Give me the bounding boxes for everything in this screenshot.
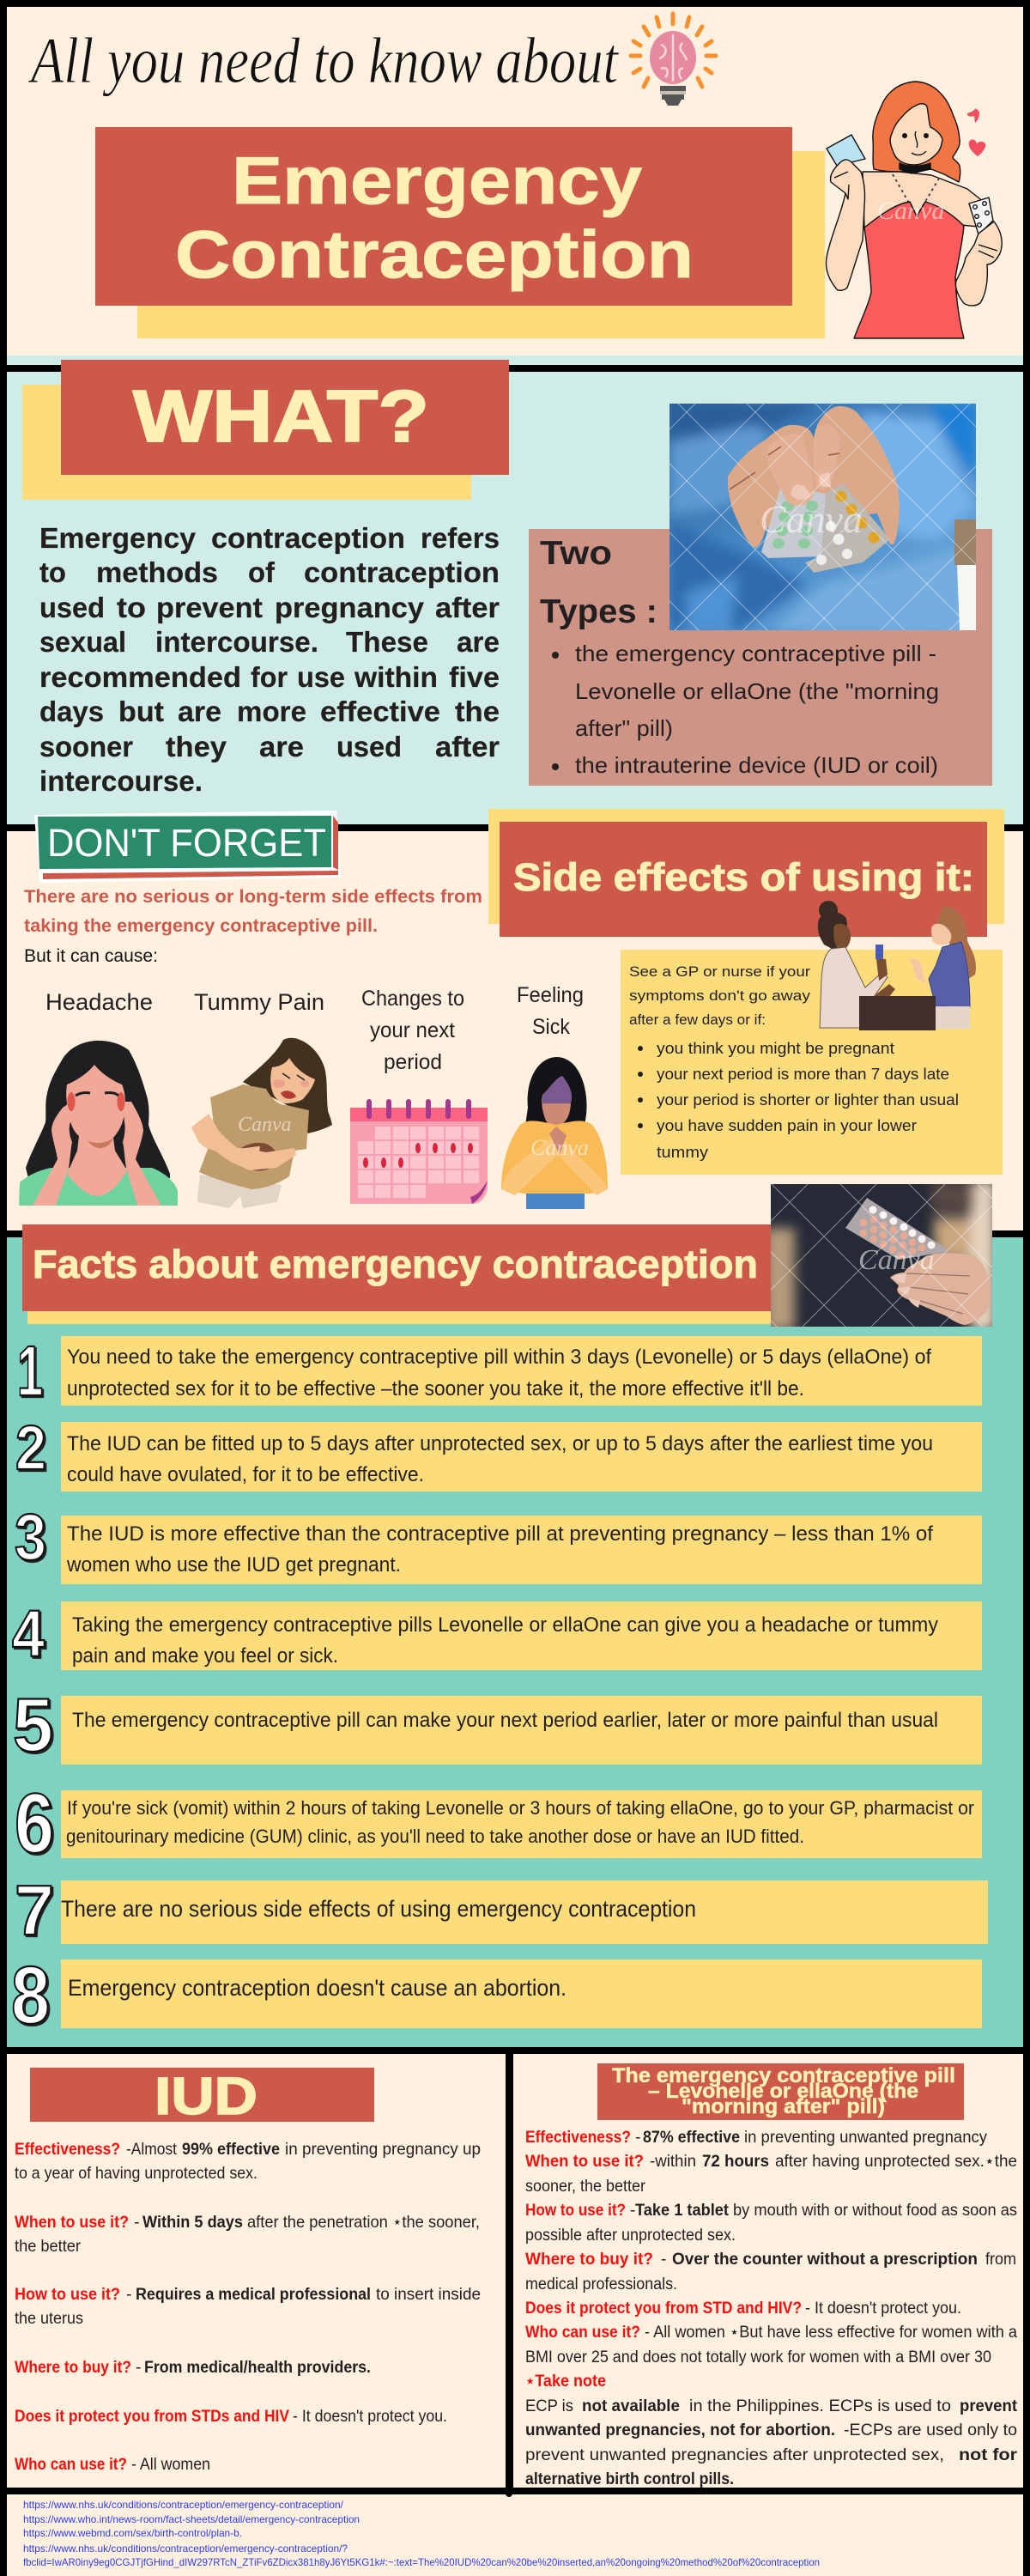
- label: changes to your next period: your next: [370, 1018, 455, 1042]
- pill details text: unwanted pregnancies, not for abortion.: [525, 2421, 835, 2439]
- warning text: taking the emergency contraceptive pill.: [24, 916, 378, 936]
- fact 3: The IUD is more effective than the contraceptive pill at preventing pregnancy – less than 1% of: [67, 1522, 933, 1546]
- heading: what: [61, 360, 509, 475]
- title block: Contraception: [175, 216, 694, 292]
- definition text block: to: [117, 592, 146, 623]
- icon: woman holding condom and pills: [826, 82, 1002, 338]
- fact 2: [15, 1413, 982, 1492]
- definition text block: after: [435, 731, 500, 762]
- pill details text: Over the counter without a prescription: [672, 2251, 978, 2269]
- heading: the pill: – Levonelle or ellaOne (the: [648, 2080, 918, 2103]
- icon: light bulb with brain: [631, 14, 716, 106]
- panel: see a gp note: your period is shorter or lighter than usual: [657, 1091, 959, 1109]
- definition text block: for: [251, 661, 288, 693]
- pill details text: -: [661, 2251, 666, 2269]
- iud details text: When to use it?: [15, 2213, 129, 2232]
- iud details text: the uterus: [15, 2309, 83, 2328]
- iud details text: [15, 2140, 481, 2474]
- definition text block: prevent: [156, 592, 263, 623]
- definition text block: intercourse.: [39, 765, 203, 797]
- heading: the pill: "morning after" pill): [682, 2095, 885, 2118]
- label: tummy pain: Tummy Pain: [194, 989, 324, 1015]
- warning text: But it can cause:: [24, 946, 158, 966]
- pill details text: Who can use it?: [525, 2324, 640, 2342]
- iud details text: Effectiveness?: [15, 2140, 120, 2159]
- panel: references: https://www.webmd.com/sex/birth-control/plan-b.: [23, 2527, 242, 2539]
- pill details text: 87% effective: [643, 2129, 740, 2147]
- iud details text: Does it protect you from STDs and HIV: [15, 2407, 289, 2426]
- pill details text: - It doesn't protect you.: [805, 2300, 961, 2318]
- fact 8: 8: [11, 1950, 50, 2041]
- pill details text: ECP is: [525, 2397, 573, 2415]
- definition text block: after: [435, 592, 500, 623]
- pill details text: BMI over 25 and does not totally work for women with a BMI over 30: [525, 2348, 991, 2366]
- iud details text: -Almost: [126, 2140, 178, 2159]
- fact 4: Taking the emergency contraceptive pills Levonelle or ellaOne can give you a headache or tummy: [72, 1613, 938, 1637]
- title block: Emergency: [232, 143, 642, 218]
- pill details text: Take 1 tablet: [635, 2202, 730, 2220]
- definition text block: used: [336, 731, 402, 762]
- label: feeling sick: [517, 983, 584, 1039]
- iud details text: Who can use it?: [15, 2455, 127, 2474]
- photo: hands holding blister pack: Canva: [760, 497, 863, 541]
- pill details text: in preventing unwanted pregnancy: [744, 2129, 987, 2147]
- panel: facts: [7, 1181, 1023, 2047]
- panel: references: fbclid=IwAR0iny9eg0CGJTjfGHind_dIW297RTcN_ZTiFv6ZDicx381h8yJ6Yt5KG1k#:~:text=The%20IUD%20can%20be%20inserted,an%20ongoing%20method%20of%20contraception: [23, 2556, 820, 2568]
- pill details text: sooner, the better: [525, 2178, 646, 2196]
- fact 4: pain and make you feel or sick.: [72, 1644, 338, 1668]
- fact 5: 5: [13, 1682, 53, 1767]
- panel: references: [7, 2490, 1023, 2576]
- definition text block: Emergency: [39, 522, 197, 554]
- panel: emergency contraceptive pill: [513, 2054, 1023, 2488]
- definition text block: intercourse.: [155, 626, 318, 658]
- panel: two types: Types :: [540, 593, 657, 630]
- fact 2: The IUD can be fitted up to 5 days after unprotected sex, or up to 5 days after the earliest time you: [67, 1432, 933, 1455]
- iud details text: -: [134, 2213, 139, 2232]
- label: changes to your next period: Changes to: [361, 987, 464, 1011]
- definition text block: but: [118, 696, 164, 727]
- pill details text: not available: [582, 2397, 680, 2415]
- panel: see a gp note: you think you might be pregnant: [657, 1040, 894, 1057]
- panel: two types: the emergency contraceptive pill -: [575, 641, 936, 666]
- definition text block: These: [346, 626, 428, 658]
- fact 3: 3: [15, 1501, 46, 1574]
- fact 6: If you're sick (vomit) within 2 hours of taking Levonelle or 3 hours of taking ellaOne, go to your GP, pharmacist or: [67, 1797, 974, 1819]
- definition text block: contraception: [304, 556, 500, 588]
- photo: hand holding pill pack: Canva: [858, 1244, 935, 1276]
- pill details text: -within: [650, 2153, 696, 2171]
- panel: see a gp note: symptoms don't go away: [629, 987, 811, 1004]
- panel: see a gp note: See a GP or nurse if your: [629, 963, 810, 980]
- panel: references: https://www.nhs.uk/conditions/contraception/emergency-contraception/?: [23, 2543, 348, 2555]
- accent: yellow block behind title: [137, 151, 825, 338]
- accent: yellow strip under facts heading: [27, 1288, 771, 1324]
- title script line: All you need to know about: [27, 25, 620, 97]
- iud details text: after the penetration ⋆the sooner,: [247, 2213, 480, 2232]
- pill details text: ⋆Take note: [525, 2372, 606, 2391]
- iud details text: Within 5 days: [142, 2213, 243, 2232]
- fact 6: [15, 1776, 982, 1870]
- definition text block: days: [39, 696, 104, 727]
- fact 3: [15, 1501, 982, 1584]
- iud details text: to a year of having unprotected sex.: [15, 2164, 258, 2183]
- panel: header: [7, 7, 1023, 355]
- pill details text: in the Philippines. ECPs is used to: [689, 2397, 951, 2415]
- pill details text: after having unprotected sex.⋆the: [775, 2153, 1017, 2171]
- heading: what: WHAT?: [133, 376, 429, 458]
- label: changes to your next period: period: [384, 1050, 442, 1074]
- definition text block: to: [39, 556, 66, 588]
- definition text block: refers: [421, 522, 500, 554]
- iud details text: - All women: [131, 2455, 210, 2474]
- fact 2: 2: [15, 1413, 46, 1483]
- icon: doctor and patient at desk: [818, 901, 976, 1030]
- heading: side effects: [500, 822, 987, 937]
- definition text block: of: [248, 556, 276, 588]
- pill details text: not for: [959, 2446, 1018, 2464]
- callout: dont forget sign: [34, 811, 342, 883]
- heading: the pill: [597, 2063, 964, 2120]
- iud details text: Where to buy it?: [15, 2358, 131, 2377]
- heading: facts: Facts about emergency contraception: [33, 1242, 758, 1286]
- heading: iud: IUD: [154, 2067, 258, 2125]
- pill details text: by mouth with or without food as soon as: [733, 2202, 1017, 2220]
- panel: see a gp note: your next period is more than 7 days late: [657, 1066, 949, 1083]
- pill details text: When to use it?: [525, 2153, 644, 2171]
- icon: woman with tummy pain: Canva: [238, 1114, 292, 1136]
- iud details text: the better: [15, 2237, 81, 2256]
- panel: two types: [529, 529, 992, 786]
- panel: see a gp note: tummy: [657, 1144, 708, 1161]
- definition text block: recommended: [39, 661, 241, 693]
- pill details text: -: [630, 2202, 635, 2220]
- panel: see a gp note: you have sudden pain in your lower: [657, 1117, 917, 1134]
- panel: references: https://www.nhs.uk/conditions/contraception/emergency-contraception/: [23, 2499, 344, 2511]
- pill details text: -: [635, 2129, 640, 2147]
- definition text block: used: [39, 592, 105, 623]
- iud details text: How to use it?: [15, 2285, 120, 2304]
- fact 4: 4: [12, 1597, 45, 1671]
- warning text: There are no serious or long-term side effects from: [24, 887, 482, 907]
- definition text block: [39, 522, 500, 797]
- warning text: [24, 887, 482, 966]
- panel: iud: [7, 2054, 506, 2488]
- fact 7: [15, 1870, 988, 1950]
- iud details text: to insert inside: [376, 2285, 481, 2304]
- iud details text: From medical/health providers.: [144, 2358, 371, 2377]
- pill details text: Effectiveness?: [525, 2129, 631, 2147]
- icon: woman with tummy pain: [191, 1038, 332, 1208]
- definition text block: pregnancy: [275, 592, 425, 623]
- fact 6: genitourinary medicine (GUM) clinic, as you'll need to take another dose or have an IUD fitted.: [66, 1826, 804, 1847]
- fact 8: [11, 1950, 982, 2041]
- fact 7: There are no serious side effects of using emergency contraception: [61, 1896, 696, 1922]
- pill details text: from: [985, 2251, 1016, 2269]
- icon: woman with headache: [19, 1041, 178, 1206]
- pill details text: prevent: [960, 2397, 1018, 2415]
- icon: calendar: [350, 1102, 488, 1204]
- fact 2: could have ovulated, for it to be effective.: [67, 1463, 424, 1486]
- fact 1: [17, 1331, 982, 1411]
- pill details text: Where to buy it?: [525, 2251, 653, 2269]
- pill details text: Does it protect you from STD and HIV?: [525, 2300, 802, 2318]
- icon: woman feeling sick: [501, 1057, 608, 1209]
- iud details text: Requires a medical professional: [136, 2285, 371, 2304]
- callout: dont forget sign: DON'T FORGET: [47, 821, 326, 865]
- definition text block: use: [297, 661, 345, 693]
- panel: two types: after" pill): [575, 715, 673, 741]
- panel: two types: Two: [540, 535, 612, 572]
- fact 1: 1: [17, 1331, 43, 1411]
- fact 5: The emergency contraceptive pill can make your next period earlier, later or more painful than usual: [72, 1709, 938, 1732]
- fact 3: women who use the IUD get pregnant.: [66, 1553, 401, 1577]
- heading: iud: [30, 2067, 374, 2125]
- panel: two types: Levonelle or ellaOne (the "morning: [575, 678, 939, 704]
- photo: hand holding pill pack: [764, 1181, 996, 1331]
- panel: two types: the intrauterine device (IUD or coil): [575, 752, 938, 778]
- iud details text: -: [126, 2285, 132, 2304]
- label: feeling sick: Sick: [532, 1015, 570, 1039]
- panel: references: https://www.who.int/news-room/fact-sheets/detail/emergency-contraception: [23, 2513, 360, 2525]
- pill details text: prevent unwanted pregnancies after unprotected sex,: [525, 2446, 944, 2464]
- definition text block: within: [354, 661, 438, 693]
- definition text block: are: [178, 696, 221, 727]
- definition text block: are: [457, 626, 500, 658]
- icon: woman feeling sick: Canva: [530, 1135, 589, 1160]
- accent: yellow block behind side effects heading: [488, 809, 1004, 924]
- photo: hands holding blister pack: [670, 404, 976, 630]
- pill details text: [525, 2129, 1018, 2488]
- fact 1: You need to take the emergency contraceptive pill within 3 days (Levonelle) or 5 days (ellaOne) of: [67, 1346, 931, 1369]
- heading: side effects: Side effects of using it:: [513, 855, 974, 899]
- definition text block: sexual: [39, 626, 126, 658]
- definition text block: five: [449, 661, 500, 693]
- iud details text: -: [136, 2358, 141, 2377]
- pill details text: medical professionals.: [525, 2275, 677, 2293]
- label: feeling sick: Feeling: [517, 983, 584, 1007]
- label: headache: Headache: [45, 989, 153, 1015]
- iud details text: in preventing pregnancy up: [285, 2140, 481, 2159]
- fact 4: [12, 1597, 982, 1671]
- fact 6: 6: [15, 1776, 54, 1870]
- definition text block: methods: [96, 556, 218, 588]
- iud details text: - It doesn't protect you.: [293, 2407, 447, 2426]
- pill details text: -ECPs are used only to: [844, 2421, 1017, 2439]
- pill details text: alternative birth control pills.: [525, 2470, 734, 2488]
- definition text block: are: [259, 731, 304, 762]
- heading: the pill: The emergency contraceptive pill: [612, 2064, 955, 2087]
- accent: yellow block behind what heading: [22, 385, 471, 500]
- definition text block: more: [237, 696, 306, 727]
- heading: facts: [22, 1224, 771, 1311]
- fact 5: [13, 1682, 982, 1767]
- pill details text: possible after unprotected sex.: [525, 2227, 736, 2245]
- definition text block: the: [455, 696, 500, 727]
- panel: what: [7, 355, 1023, 824]
- pill details text: How to use it?: [525, 2202, 626, 2220]
- label: changes to your next period: [361, 987, 464, 1074]
- fact 7: 7: [15, 1870, 54, 1950]
- pill details text: - All women ⋆But have less effective for women with a: [645, 2324, 1017, 2342]
- panel: side effects: [7, 809, 1023, 1230]
- icon: woman holding condom and pills: Canva: [877, 197, 944, 225]
- panel: see a gp note: after a few days or if:: [629, 1012, 766, 1028]
- fact 1: unprotected sex for it to be effective –the sooner you take it, the more effective it'll be.: [67, 1377, 804, 1400]
- definition text block: they: [166, 731, 227, 762]
- pill details text: 72 hours: [702, 2153, 769, 2171]
- definition text block: contraception: [211, 522, 405, 554]
- iud details text: 99% effective: [182, 2140, 280, 2159]
- title block: [95, 127, 792, 306]
- definition text block: effective: [320, 696, 440, 727]
- fact 8: Emergency contraception doesn't cause an abortion.: [68, 1975, 566, 2001]
- panel: see a gp note: [621, 950, 1003, 1175]
- definition text block: sooner: [39, 731, 133, 762]
